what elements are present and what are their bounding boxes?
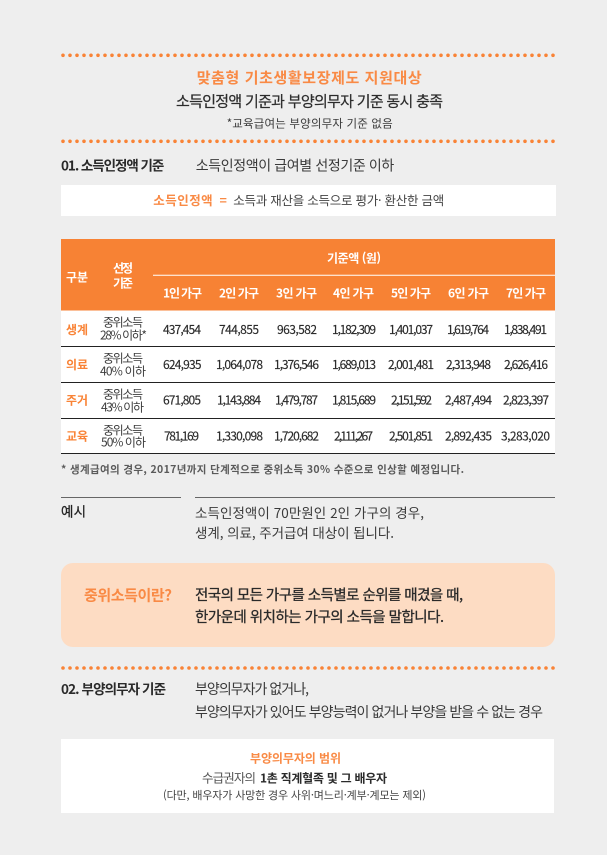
- row: 생계: 1,838,491: [504, 321, 547, 338]
- panel: scope of support obligors: 부양의무자의 범위: [250, 750, 341, 766]
- section heading 02: 02. 부양의무자 기준: [61, 678, 166, 698]
- section heading 02: 부양의무자가 있어도 부양능력이 없거나 부양을 받을 수 없는 경우: [195, 702, 543, 722]
- section heading 02: 부양의무자가 없거나,: [195, 679, 309, 699]
- row: 생계: 1,182,309: [332, 321, 376, 338]
- row: 교육: 781,169: [164, 428, 199, 444]
- row: 주거: 43% 이하: [101, 398, 144, 416]
- panel: scope of support obligors: (다만, 배우자가 사망한 경우 사위·며느리·계부·계모는 제외): [163, 787, 426, 803]
- row: 의료: 2,626,416: [504, 356, 548, 373]
- panel: income definition: =: [220, 190, 227, 209]
- row: 생계: [66, 314, 547, 344]
- row: 교육: [66, 422, 550, 450]
- panel: scope of support obligors: [61, 739, 554, 813]
- table header: 2인 가구: [219, 284, 259, 302]
- table header: 선정: [113, 260, 133, 276]
- row: 교육: 1,330,098: [216, 428, 263, 444]
- row: 의료: 의료: [66, 356, 88, 373]
- row: 생계: 437,454: [163, 321, 201, 338]
- callout: median income: 중위소득이란?: [84, 584, 172, 606]
- panel: income definition: 소득과 재산을 소득으로 평가· 환산한 금액: [233, 190, 444, 209]
- row: 주거: 2,151,592: [391, 392, 432, 408]
- row: 생계: 생계: [66, 321, 88, 338]
- row: 교육: 50% 이하: [101, 434, 146, 450]
- example: 소득인정액이 70만원인 2인 가구의 경우,: [195, 502, 424, 522]
- table header: 5인 가구: [391, 284, 431, 302]
- section heading 01: 01. 소득인정액 기준: [61, 154, 164, 174]
- row: 생계: 1,619,764: [447, 321, 489, 338]
- panel: income definition: 소득인정액: [153, 190, 213, 209]
- note: education benefit: *교육급여는 부양의무자 기준 없음: [227, 116, 393, 132]
- row: 생계: 744,855: [219, 321, 259, 338]
- table: standard amounts: [61, 239, 555, 454]
- row: 의료: 624,935: [163, 356, 202, 373]
- table header: 기준: [113, 274, 133, 292]
- row: 의료: 1,064,078: [216, 356, 263, 373]
- row: 주거: 중위소득: [103, 386, 143, 402]
- table header: 3인 가구: [276, 284, 317, 302]
- callout: median income: 한가운데 위치하는 가구의 소득을 말합니다.: [195, 606, 444, 627]
- table header: 구분: [66, 268, 88, 286]
- row: 생계: 28% 이하*: [100, 326, 147, 344]
- table header: 7인 가구: [506, 284, 546, 302]
- table header: 6인 가구: [448, 284, 489, 302]
- example: [61, 500, 424, 542]
- row: 의료: 중위소득: [103, 350, 143, 366]
- row: 주거: 1,143,884: [217, 392, 261, 408]
- title: 맞춤형 기초생활보장제도 지원대상: [197, 67, 422, 88]
- row: 교육: 중위소득: [103, 422, 143, 438]
- row: 주거: 1,815,689: [332, 392, 376, 408]
- table footnote: * 생계급여의 경우, 2017년까지 단계적으로 중위소득 30% 수준으로 인상할 예정입니다.: [61, 462, 464, 477]
- table header: 1인 가구: [163, 284, 202, 302]
- callout: median income: 전국의 모든 가구를 소득별로 순위를 매겼을 때,: [195, 584, 463, 605]
- table header: 기준액 (원): [327, 250, 381, 266]
- section heading 01: 소득인정액이 급여별 선정기준 이하: [196, 156, 394, 176]
- row: 주거: 2,823,397: [503, 392, 549, 408]
- example: 예시: [61, 500, 86, 520]
- row: 교육: 2,892,435: [445, 428, 492, 444]
- panel: scope of support obligors: 1촌 직계혈족 및 그 배우자: [260, 770, 387, 786]
- row: 의료: 2,313,948: [446, 356, 491, 373]
- row: 주거: 2,487,494: [445, 392, 492, 408]
- row: 생계: 중위소득: [103, 314, 143, 330]
- row: 교육: 1,720,682: [274, 428, 319, 444]
- row: 교육: 2,501,851: [389, 428, 433, 444]
- row: 의료: 2,001,481: [388, 356, 434, 373]
- table header: 4인 가구: [333, 284, 374, 302]
- section heading 02: [61, 678, 543, 722]
- subtitle: 소득인정액 기준과 부양의무자 기준 동시 충족: [176, 90, 443, 112]
- callout: median income: [61, 563, 555, 647]
- panel: scope of support obligors: 수급권자의: [202, 768, 256, 786]
- row: 의료: 1,376,546: [274, 356, 319, 373]
- row: 의료: [66, 350, 548, 380]
- row: 주거: [66, 386, 549, 416]
- row: 주거: 671,805: [163, 392, 201, 408]
- row: 의료: 40% 이하: [100, 362, 146, 380]
- section heading 01: [61, 154, 394, 176]
- row: 주거: 주거: [66, 391, 88, 408]
- row: 생계: 963,582: [277, 321, 317, 338]
- example: 생계, 의료, 주거급여 대상이 됩니다.: [195, 522, 394, 542]
- row: 생계: 1,401,037: [389, 321, 433, 338]
- row: 교육: 2,111,267: [334, 428, 373, 444]
- row: 교육: 교육: [66, 427, 88, 444]
- panel: income definition: [61, 185, 556, 216]
- table header: [61, 239, 555, 310]
- row: 의료: 1,689,013: [332, 356, 376, 373]
- row: 주거: 1,479,787: [275, 392, 318, 408]
- row: 교육: 3,283,020: [501, 428, 550, 444]
